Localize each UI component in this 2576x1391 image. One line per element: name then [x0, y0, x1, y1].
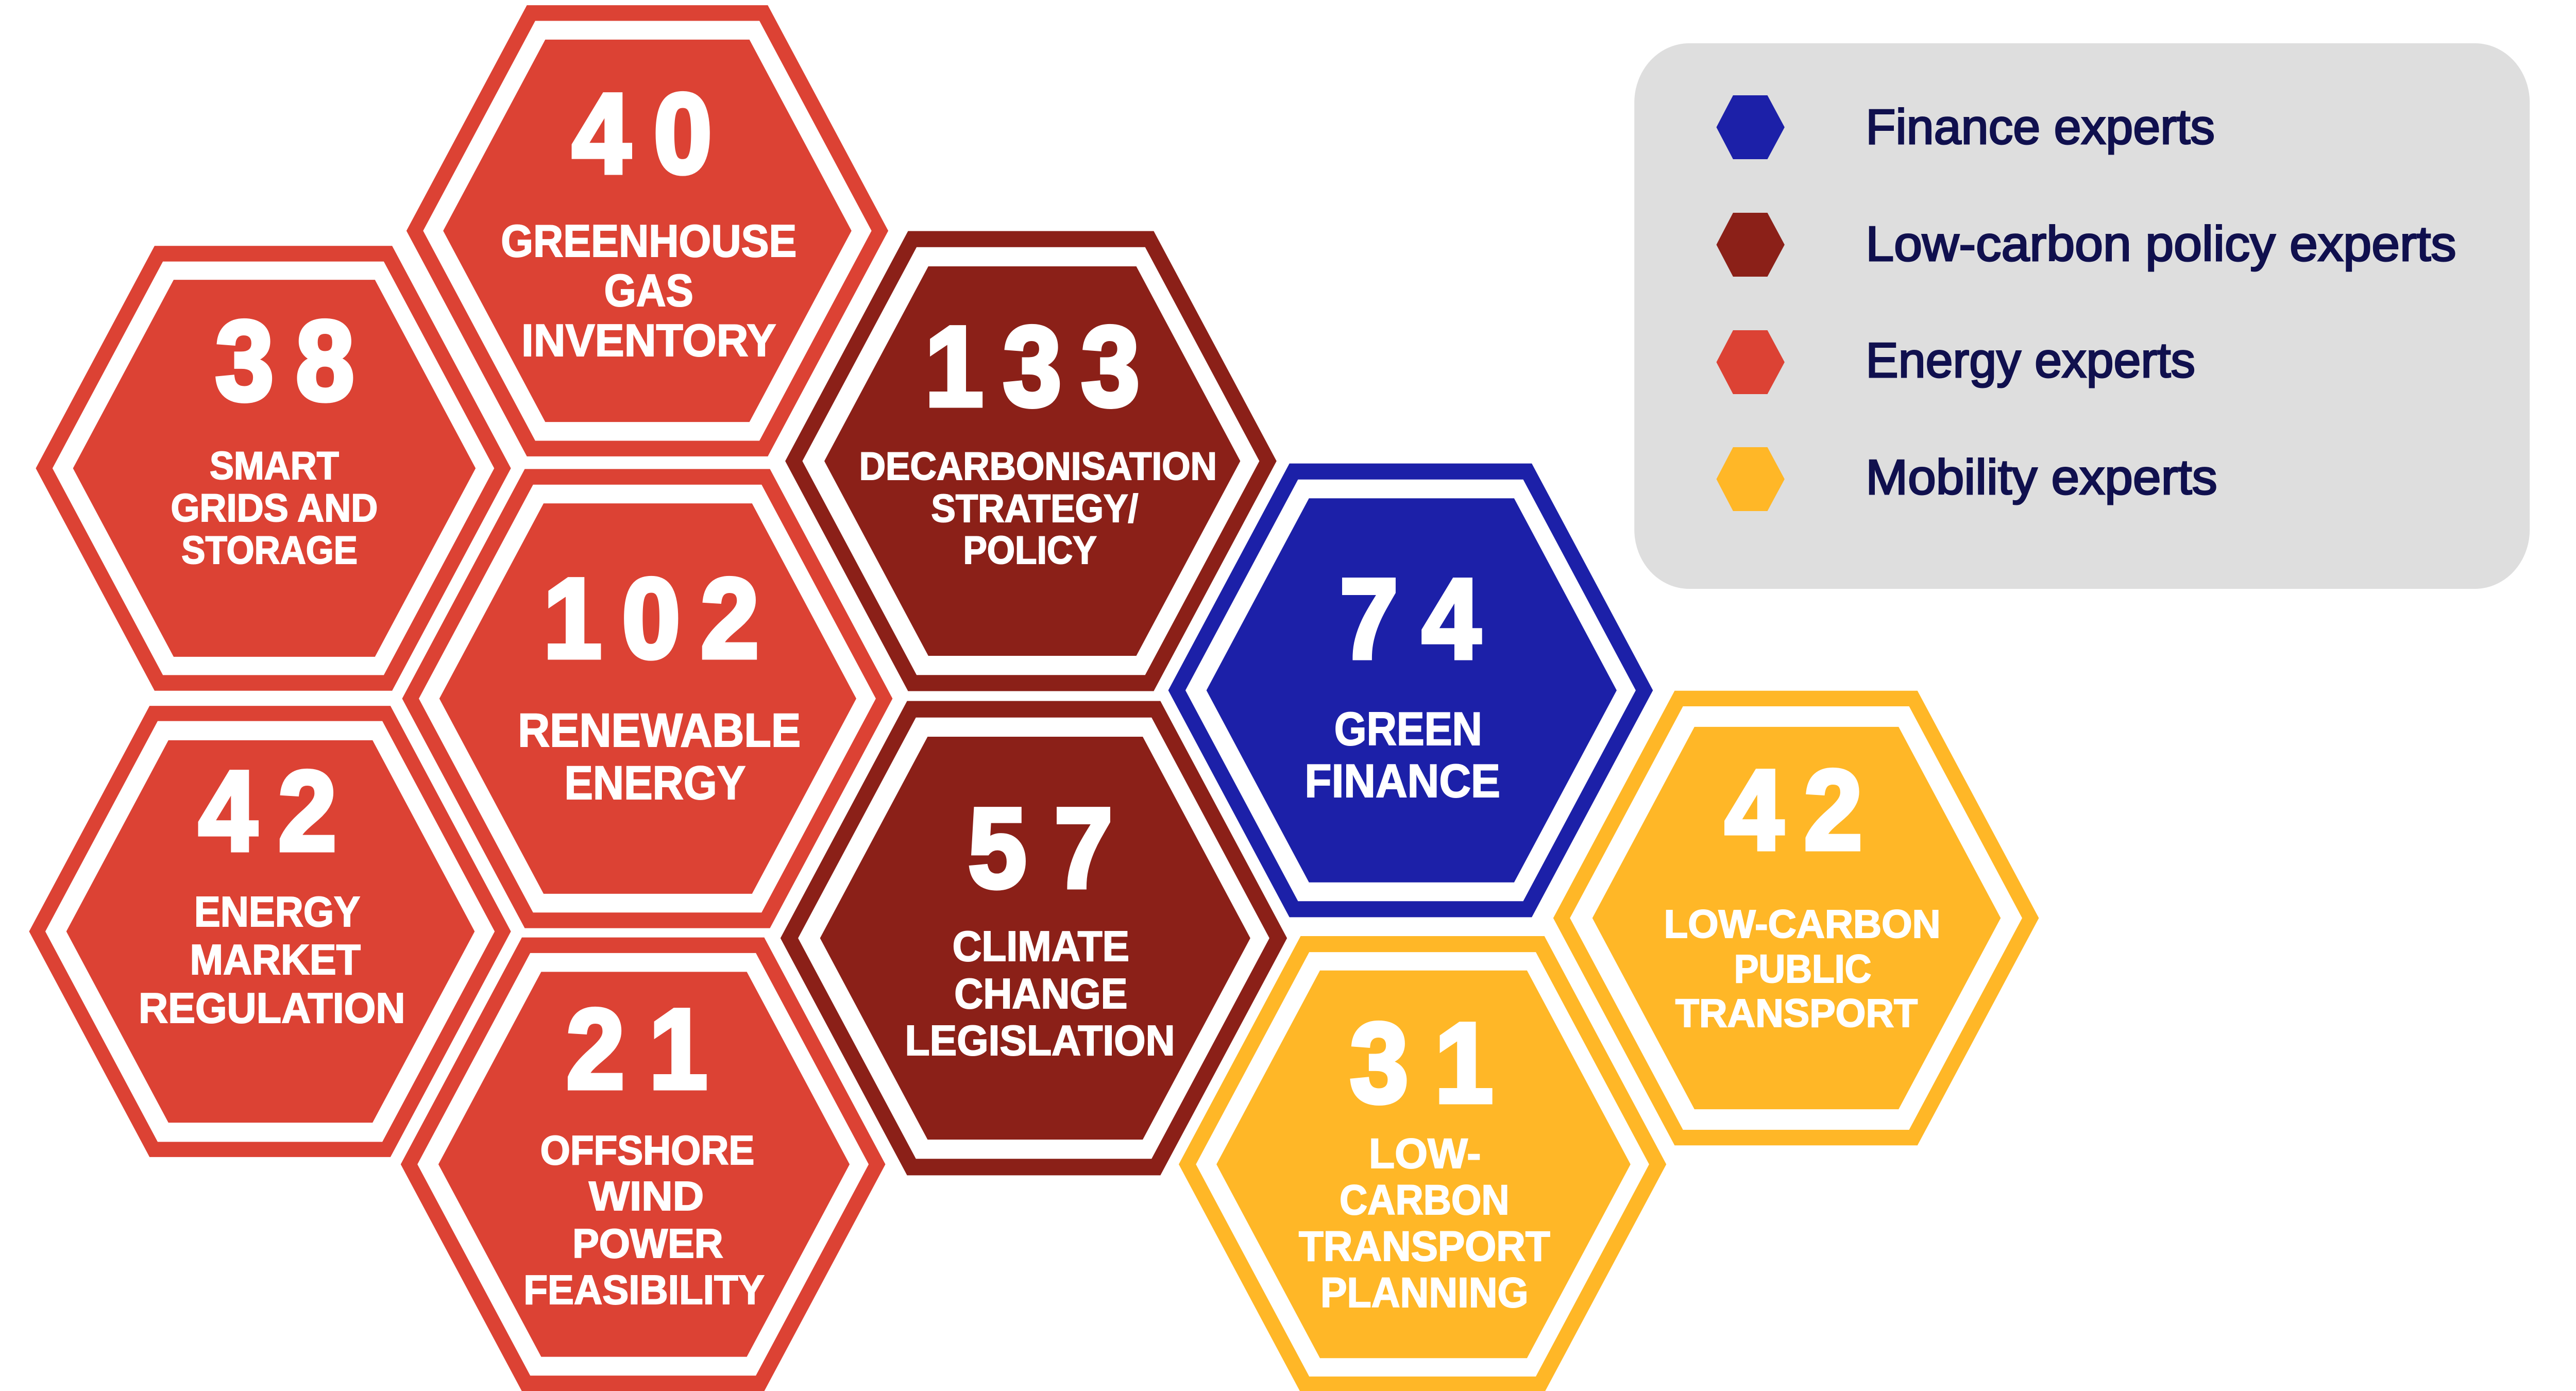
hexagon: decarbonisation strategy/policy: 133	[925, 303, 1140, 430]
hexagon: low-carbon public transport: PUBLIC	[1734, 946, 1871, 991]
hexagon: offshore wind power feasibility: FEASIBILITY	[523, 1267, 765, 1313]
hexagon: energy market regulation: 42	[199, 748, 336, 874]
hexagon: greenhouse gas inventory: INVENTORY	[521, 315, 776, 366]
hexagon: low-carbon public transport: 42	[1725, 747, 1862, 873]
hexagon: greenhouse gas inventory	[406, 5, 888, 456]
hexagon: green finance: 74	[1340, 555, 1481, 682]
hexagon: energy market regulation: REGULATION	[139, 984, 405, 1032]
hexagon: smart grids and storage	[36, 246, 511, 691]
hexagon: low-carbon transport planning	[1179, 936, 1666, 1391]
legend item: mobility experts	[1716, 447, 2217, 511]
hexagon: green finance: GREEN	[1334, 703, 1482, 755]
legend item: low-carbon policy experts	[1716, 213, 2456, 277]
legend item: low-carbon policy experts: Low-carbon policy experts	[1866, 216, 2456, 272]
hexagon: smart grids and storage: STORAGE	[181, 529, 358, 572]
hexagon: low-carbon transport planning: 31	[1350, 999, 1493, 1126]
hexagon: low-carbon public transport: TRANSPORT	[1675, 991, 1918, 1036]
panel: legend	[1634, 43, 2530, 589]
hexagon: greenhouse gas inventory: GREENHOUSE	[501, 215, 796, 266]
hexagon: offshore wind power feasibility: OFFSHORE	[540, 1127, 754, 1174]
hexagon: renewable energy: RENEWABLE	[518, 704, 801, 757]
hexagon: decarbonisation strategy/policy	[785, 231, 1277, 691]
legend item: mobility experts: Mobility experts	[1866, 449, 2217, 505]
hexagon: energy market regulation: MARKET	[190, 936, 361, 983]
hexagon: green finance: FINANCE	[1304, 755, 1500, 807]
hexagon: energy market regulation	[29, 706, 511, 1157]
hexagon: renewable energy: 102	[544, 555, 759, 682]
legend item: finance experts: Finance experts	[1866, 99, 2215, 155]
hexagon: low-carbon public transport: LOW-CARBON	[1664, 902, 1941, 946]
legend item: energy experts: Energy experts	[1866, 332, 2195, 388]
hexagon: climate change legislation: LEGISLATION	[905, 1016, 1175, 1064]
hexagon: climate change legislation	[781, 701, 1287, 1175]
hexagon: smart grids and storage: GRIDS AND	[171, 486, 378, 530]
hexagon: low-carbon transport planning: PLANNING	[1320, 1268, 1529, 1316]
hexagon: green finance	[1168, 464, 1653, 917]
hexagon: offshore wind power feasibility: WIND	[589, 1173, 704, 1219]
hexagon: smart grids and storage: 38	[215, 297, 354, 424]
legend item: finance experts	[1716, 95, 2215, 159]
hexagon: offshore wind power feasibility: 21	[566, 986, 707, 1112]
hexagon: low-carbon transport planning: TRANSPORT	[1299, 1222, 1550, 1270]
hexagon: smart grids and storage: SMART	[210, 444, 339, 488]
hexagon: renewable energy	[402, 469, 892, 928]
hexagon: offshore wind power feasibility: POWER	[572, 1220, 723, 1267]
hexagon: low-carbon transport planning: CARBON	[1340, 1176, 1510, 1224]
hexagon: climate change legislation: CLIMATE	[953, 922, 1129, 970]
hexagon: climate change legislation: 57	[968, 785, 1113, 911]
hexagon: climate change legislation: CHANGE	[954, 970, 1127, 1017]
hexagon: decarbonisation strategy/policy: STRATEGY/	[931, 487, 1138, 531]
hexagon: decarbonisation strategy/policy: POLICY	[963, 529, 1097, 572]
hexagon: low-carbon public transport	[1553, 691, 2039, 1145]
hexagon: greenhouse gas inventory: 40	[572, 70, 712, 197]
hexagon: greenhouse gas inventory: GAS	[604, 265, 693, 316]
hexagon: energy market regulation: ENERGY	[194, 888, 360, 936]
legend item: energy experts	[1716, 330, 2195, 394]
hexagon: renewable energy: ENERGY	[564, 756, 745, 809]
hexagon: offshore wind power feasibility	[401, 938, 886, 1391]
hexagon: low-carbon transport planning: LOW-	[1369, 1129, 1481, 1177]
hexagon: decarbonisation strategy/policy: DECARBONISATION	[859, 445, 1217, 488]
